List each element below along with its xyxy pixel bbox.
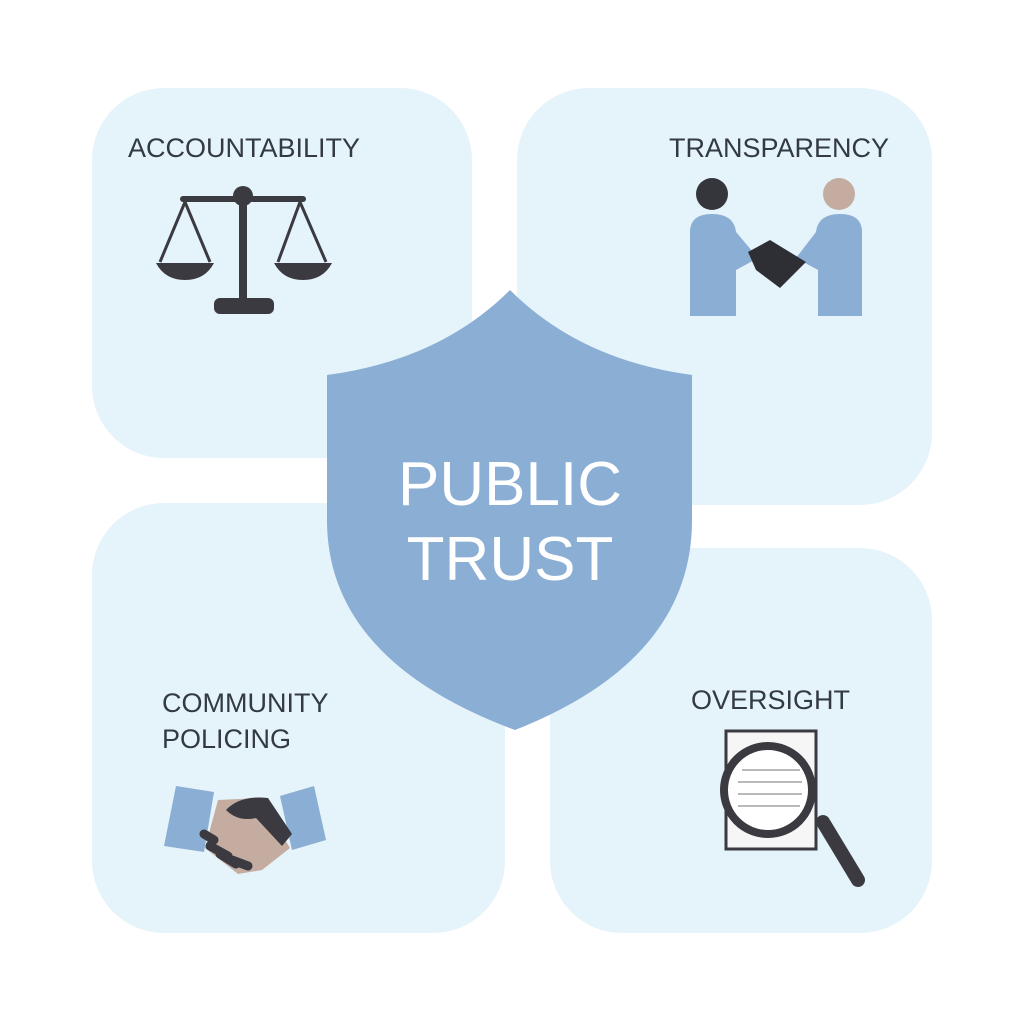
shield: public trust: TRUST [407,525,613,594]
heading: transparency: TRANSPARENCY [669,133,889,163]
shield: public trust [327,290,692,730]
heading: oversight: OVERSIGHT [691,685,850,715]
icon: magnifier on document [724,731,858,880]
heading: community policing [162,688,328,754]
icon: two people handshake [690,178,862,316]
shield: public trust: PUBLIC [398,450,622,519]
panel: community policing [92,503,505,933]
panel: accountability [92,88,472,458]
heading: community policing: POLICING [162,724,291,754]
icon: handshake community [164,786,326,874]
icon: scales [156,186,332,314]
heading: accountability: ACCOUNTABILITY [128,133,360,163]
panel: oversight [550,548,932,933]
panel: transparency [517,88,932,505]
heading: community policing: COMMUNITY [162,688,328,718]
